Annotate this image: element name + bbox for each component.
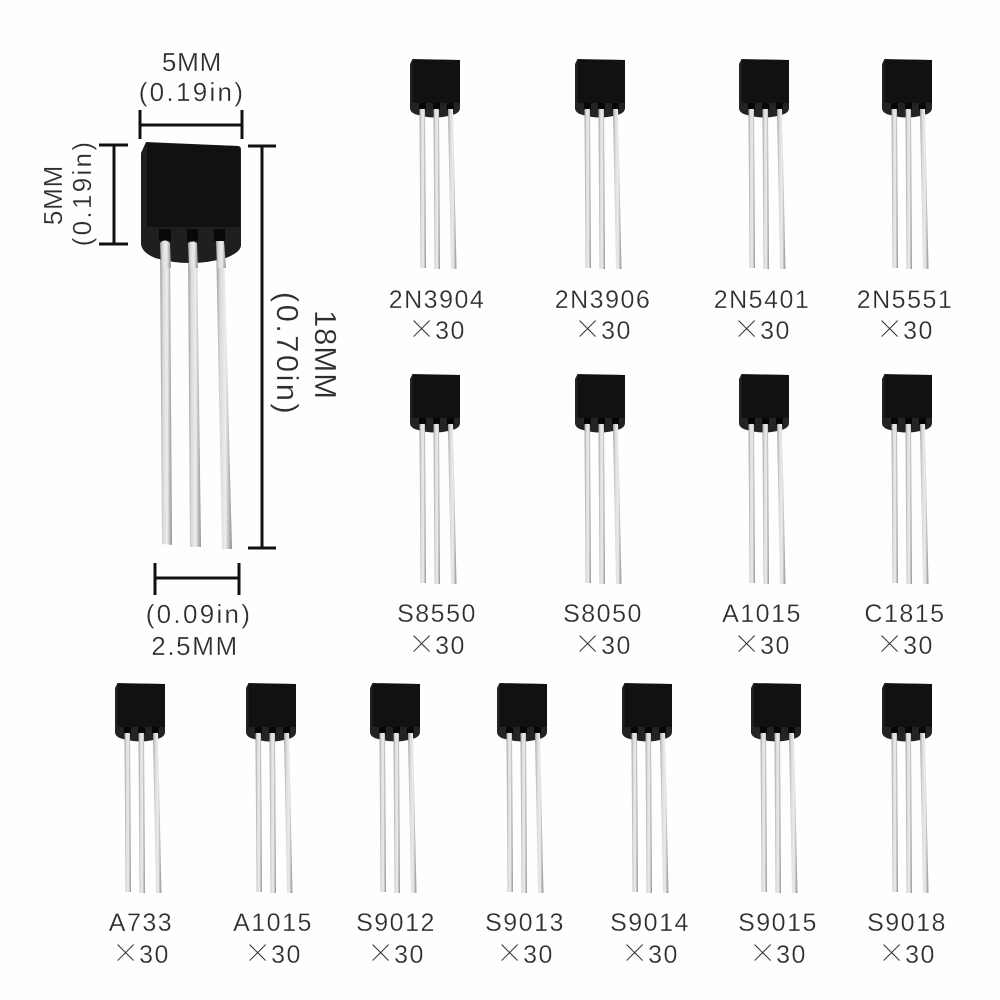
2N3906: ×30 <box>574 308 632 347</box>
dimension: pin spacing <box>146 563 252 661</box>
dimension: top width <box>139 47 245 139</box>
S9012: ×30 <box>367 932 425 971</box>
row 1 transistors <box>389 59 953 347</box>
S9012: S9012 <box>356 909 436 937</box>
S9014 <box>610 683 690 971</box>
S9014: ×30 <box>621 932 679 971</box>
C1815 <box>864 374 946 662</box>
S8050: S8050 <box>563 600 643 628</box>
A733 <box>109 683 173 971</box>
2N3904 <box>389 59 485 347</box>
dimension: pin spacing: 2.5MM <box>151 631 239 661</box>
dimension: left height <box>38 140 128 246</box>
A1015: A1015 <box>722 600 802 628</box>
C1815: ×30 <box>876 623 934 662</box>
S9012 <box>356 683 436 971</box>
dimension: top width: 5MM <box>162 47 222 77</box>
2N3904: 2N3904 <box>389 286 485 314</box>
S8550 <box>397 374 477 662</box>
S9018 <box>867 683 947 971</box>
dimension: total height: 18MM <box>308 310 343 400</box>
row 3 transistors <box>109 683 947 971</box>
S9014: S9014 <box>610 909 690 937</box>
A733: A733 <box>109 909 173 937</box>
A1015: A1015 <box>233 909 313 937</box>
2N3906 <box>555 59 651 347</box>
2N5401 <box>714 59 810 347</box>
S9015 <box>738 683 818 971</box>
S9018: S9018 <box>867 909 947 937</box>
dimension: pin spacing: (0.09in) <box>146 599 252 629</box>
dimension: total height: (0.70in) <box>270 292 305 416</box>
S9018: ×30 <box>878 932 936 971</box>
S9015: S9015 <box>738 909 818 937</box>
S8550: ×30 <box>408 623 466 662</box>
A1015: ×30 <box>244 932 302 971</box>
S9013: ×30 <box>496 932 554 971</box>
dimension: total height <box>248 146 343 548</box>
C1815: C1815 <box>864 600 946 628</box>
A1015 <box>233 683 313 971</box>
dimension: left height: 5MM <box>38 165 68 225</box>
dimension: left height: (0.19in) <box>67 140 97 246</box>
2N3906: 2N3906 <box>555 286 651 314</box>
2N5551: ×30 <box>876 308 934 347</box>
S9015: ×30 <box>749 932 807 971</box>
S9013 <box>485 683 565 971</box>
A1015 <box>722 374 802 662</box>
A1015: ×30 <box>733 623 791 662</box>
2N5401: ×30 <box>733 308 791 347</box>
A733: ×30 <box>112 932 170 971</box>
S9013: S9013 <box>485 909 565 937</box>
2N5551 <box>857 59 953 347</box>
dimension: top width: (0.19in) <box>139 77 245 107</box>
large transistor body and pins <box>141 142 241 549</box>
S8550: S8550 <box>397 600 477 628</box>
2N3904: ×30 <box>408 308 466 347</box>
2N5401: 2N5401 <box>714 286 810 314</box>
row 2 transistors <box>397 374 946 662</box>
large transistor with dimensions <box>38 47 343 661</box>
S8050 <box>563 374 643 662</box>
2N5551: 2N5551 <box>857 286 953 314</box>
S8050: ×30 <box>574 623 632 662</box>
